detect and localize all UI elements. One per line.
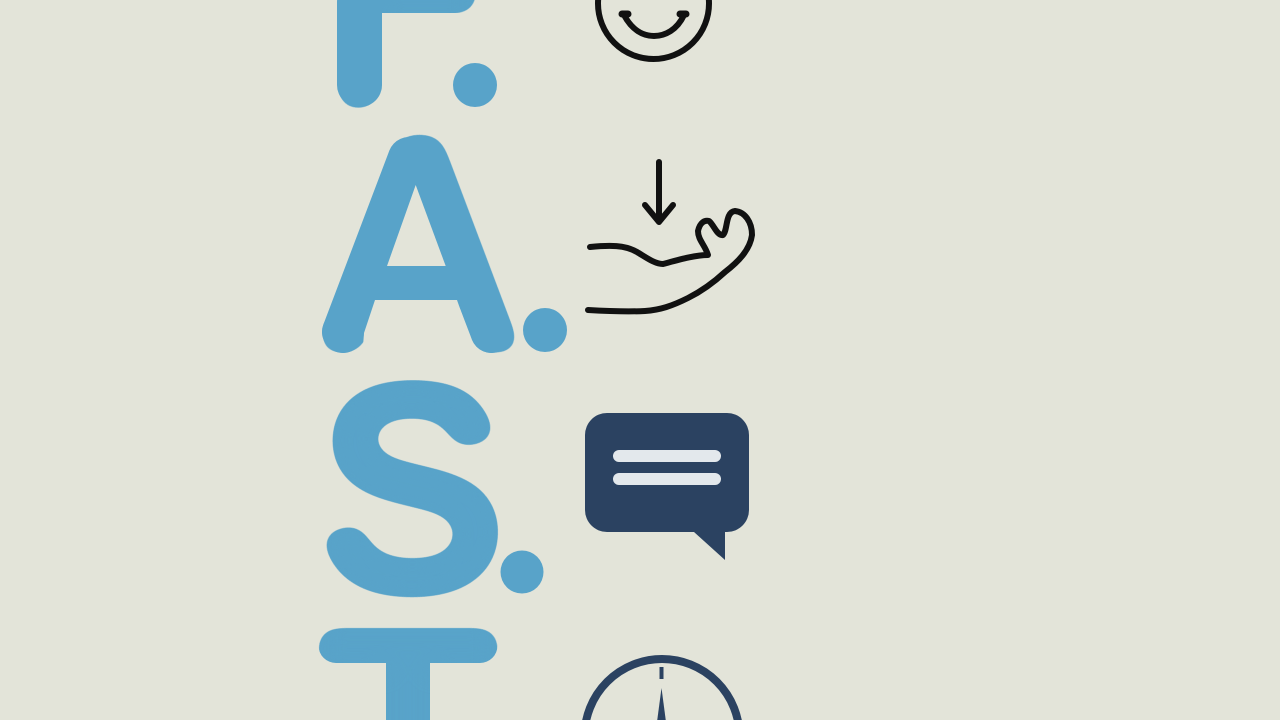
icon: smiling face	[598, 0, 709, 59]
icon: clock	[584, 659, 740, 720]
icon: speech bubble	[585, 413, 749, 560]
letter A with period: A	[328, 81, 511, 405]
icon: arm weakness with down arrow	[588, 162, 752, 311]
letter S with period: S	[320, 331, 502, 645]
